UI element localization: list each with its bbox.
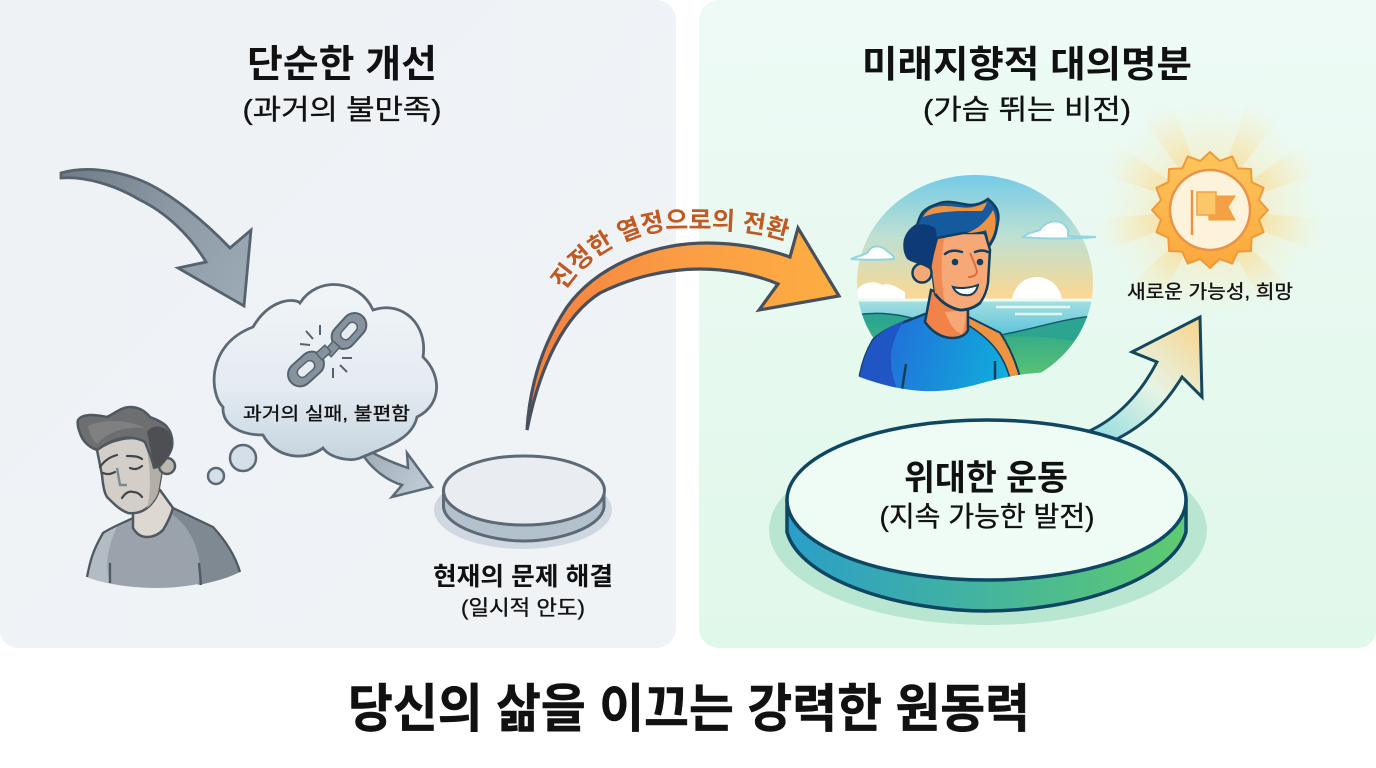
icon: sun badge with flag [1091, 97, 1329, 318]
arrow: orange transition arrow [527, 228, 839, 430]
heading: right panel: (가슴 뛰는 비전) [923, 94, 1131, 125]
label: present problem solving: 현재의 문제 해결 [433, 563, 613, 591]
thought bubbles [208, 445, 256, 484]
icon: broken chain [283, 308, 371, 391]
label: present problem solving: (일시적 안도) [461, 597, 585, 620]
heading: left panel: 단순한 개선 [247, 44, 437, 86]
heading: left panel [242, 44, 442, 125]
arrow label: transition to true passion: 진정한 열정으로의 전환 [550, 208, 790, 288]
heading: right panel: 미래지향적 대의명분 [862, 44, 1192, 85]
label: great movement: (지속 가능한 발전) [880, 501, 1094, 532]
label: great movement: 위대한 운동 [904, 459, 1068, 498]
arrow: gray curved arrow into cloud [61, 169, 251, 306]
arrow: up-right arrow to hope [1087, 317, 1202, 440]
panel: simple improvement [0, 0, 676, 648]
panel: future-oriented cause [699, 0, 1376, 648]
icon: clouds around portrait [851, 221, 1096, 260]
cloud label: 과거의 실패, 불편함 [243, 404, 410, 424]
icon: small disc [434, 456, 612, 549]
heading: right panel [862, 44, 1192, 125]
thought cloud [214, 285, 437, 460]
icon: sad person [78, 407, 240, 588]
icon: happy person in landscape [850, 170, 1100, 395]
arrow: gray arrow from cloud to disc [355, 440, 432, 497]
label: new possibility, hope: 새로운 가능성, 희망 [1127, 281, 1293, 303]
icon: large disc [769, 420, 1207, 625]
label: great movement [880, 459, 1094, 532]
title: bottom headline: 당신의 삶을 이끄는 강력한 원동력 [348, 681, 1030, 739]
label: present problem solving [433, 563, 613, 620]
heading: left panel: (과거의 불만족) [242, 94, 442, 125]
